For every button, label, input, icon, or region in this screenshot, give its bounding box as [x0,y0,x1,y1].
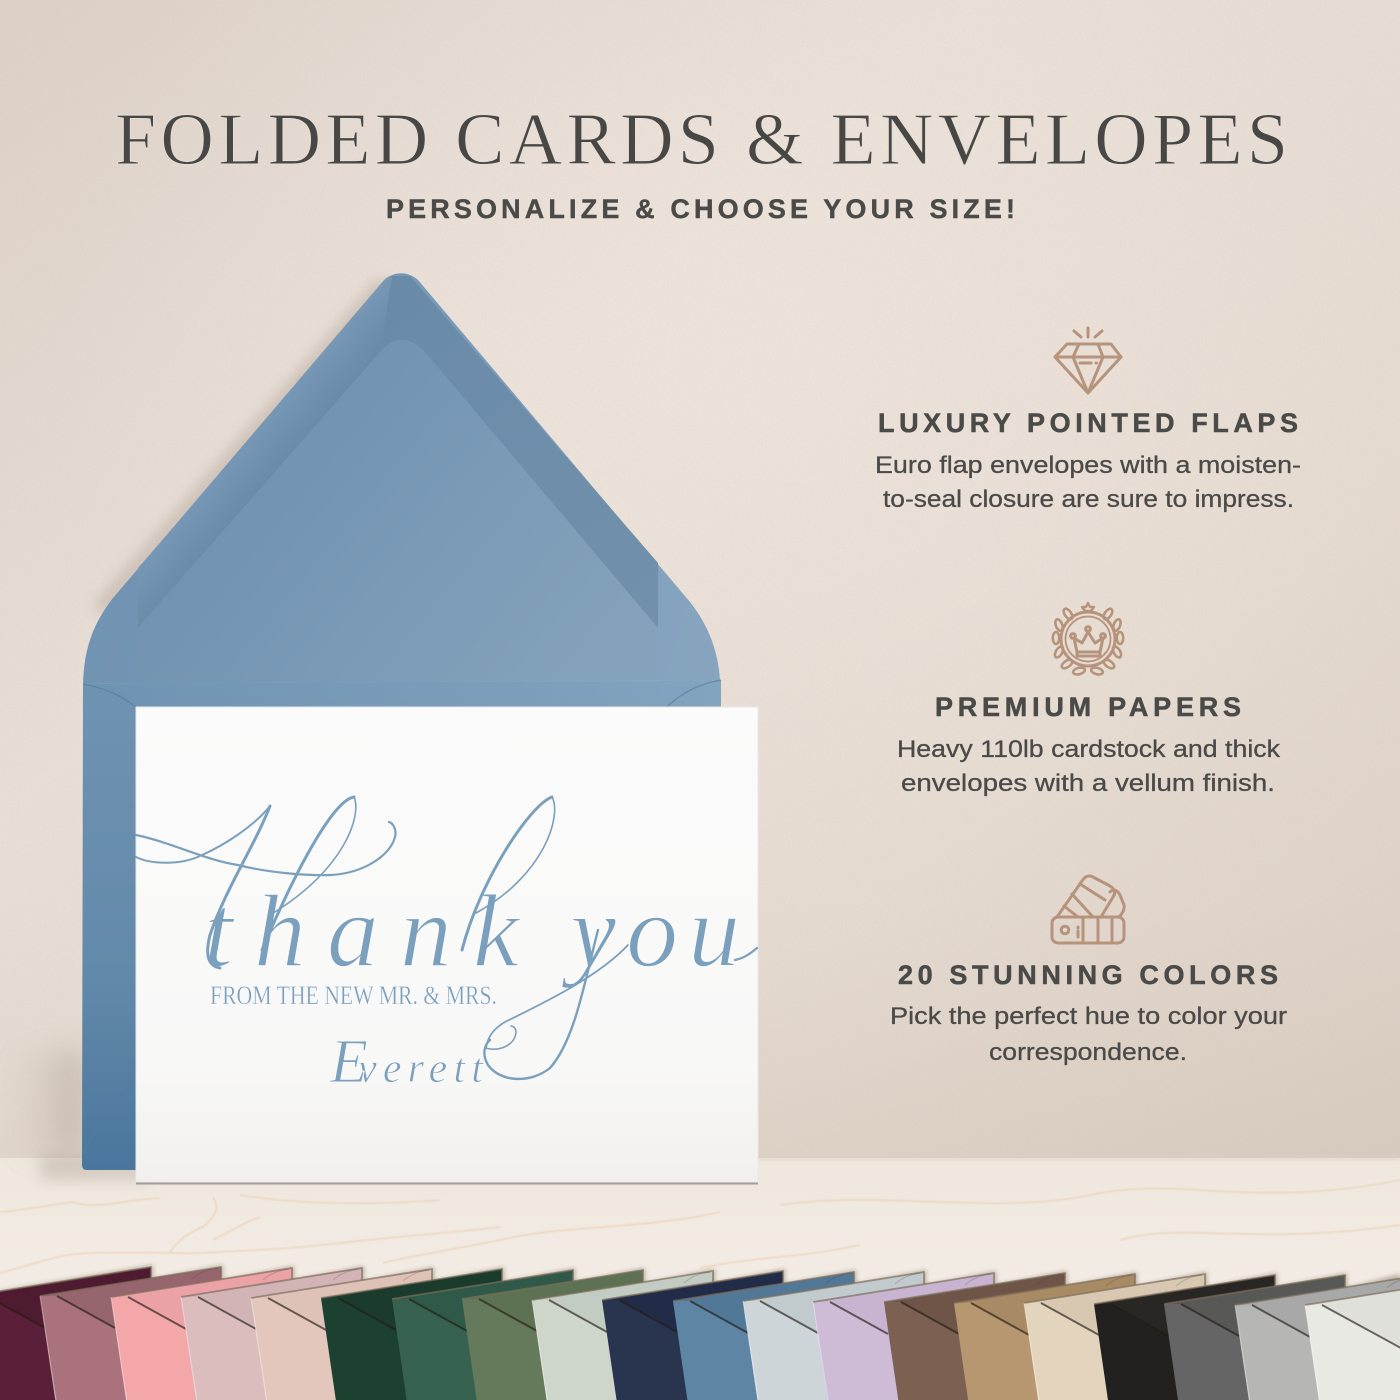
envelope body [82,680,721,1170]
heading: PREMIUM PAPERS [935,692,1241,722]
envelope: navy [602,1271,783,1400]
description [897,736,1281,797]
envelope: sage [462,1270,643,1400]
description: to-seal closure are sure to impress. [883,486,1294,513]
envelope: burgundy [0,1267,151,1400]
description: correspondence. [989,1039,1187,1066]
envelope shadows on wall and floor [20,282,385,1181]
card sub-line: FROM THE NEW MR. & MRS. [210,981,497,1010]
envelope: pale blue [743,1272,924,1400]
envelope: cream [1024,1274,1205,1400]
card signature: Everett: verett [358,1046,484,1092]
envelope: pale sage [532,1271,713,1400]
signature initial: E [329,1028,368,1096]
envelope flap [83,273,720,684]
envelope: lilac [813,1273,994,1400]
marble shelf [0,1156,1400,1400]
envelope: white [1305,1276,1400,1400]
description [875,452,1301,513]
envelope: black [1094,1275,1275,1400]
description: Pick the perfect hue to color your [890,1003,1287,1030]
envelope: pink [111,1268,292,1400]
envelope: tan [954,1274,1135,1400]
blue envelope [82,273,721,1170]
envelope: forest [321,1269,502,1400]
subtitle: PERSONALIZE & CHOOSE YOUR SIZE! [386,194,1015,224]
icon: crown seal [1053,603,1123,676]
description: Euro flap envelopes with a moisten- [875,452,1301,479]
description [890,1003,1287,1066]
envelope: teal [392,1270,573,1400]
envelope liner [138,340,658,682]
flap left band [138,276,392,628]
envelope: peach [251,1269,432,1400]
decorative swash across headline [136,797,757,1079]
body fold lines [83,680,721,1150]
envelope: brown [884,1273,1065,1400]
description: envelopes with a vellum finish. [901,770,1275,797]
icon: diamond [1055,328,1121,393]
feature: 20 stunning colors [890,876,1287,1066]
envelope: silver [1235,1276,1400,1400]
flap right band [380,276,658,628]
description: Heavy 110lb cardstock and thick [897,736,1281,763]
heading: LUXURY POINTED FLAPS [878,408,1298,438]
card headline: thank you: thank [204,874,540,989]
envelope: blush [181,1268,362,1400]
envelope: charcoal [1164,1275,1345,1400]
flap hinge band [110,680,721,707]
heading: 20 STUNNING COLORS [898,960,1278,990]
white card [136,707,758,1184]
envelope: dusty blue [673,1272,854,1400]
colour range: 20 envelopes [0,1265,1400,1400]
feature: premium papers [897,603,1281,797]
envelope: mauve [40,1267,221,1400]
card headline: thank you: you [561,874,750,989]
feature: luxury pointed flaps [875,328,1301,513]
icon: colour swatch fan [1052,876,1124,943]
title: FOLDED CARDS & ENVELOPES [115,99,1288,181]
